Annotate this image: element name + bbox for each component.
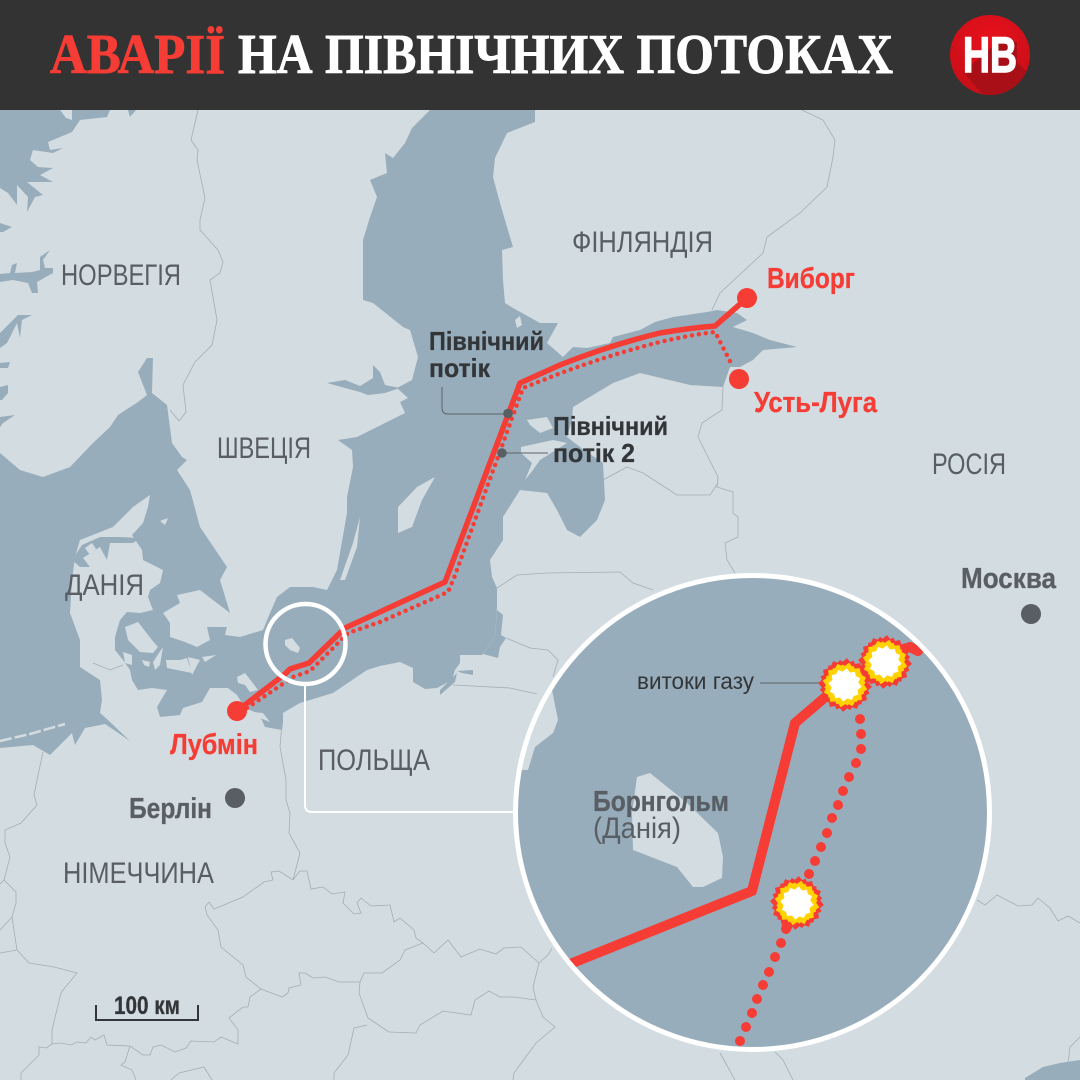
point: Berlin [225, 788, 245, 808]
city labels: Лубмін [170, 729, 258, 761]
title: НА ПІВНІЧНИХ ПОТОКАХ [238, 24, 893, 86]
country labels: ШВЕЦІЯ [217, 432, 311, 465]
city labels: Берлін [129, 793, 212, 825]
sea: north-west Norwegian Sea [0, 110, 110, 212]
inset: Nord Stream 2 dots [735, 714, 866, 1046]
inset: Swedish coast [522, 690, 558, 770]
inset ring [516, 576, 990, 1050]
inset map: Bornholm [500, 576, 990, 1050]
explosion: leak 1 [812, 652, 878, 718]
country labels [61, 226, 1006, 890]
inset: Bornholm island [632, 773, 723, 887]
inset: label Denmark: (Данія) [593, 812, 681, 845]
locator circle around Bornholm [266, 604, 346, 684]
point: Vyborg [737, 288, 757, 308]
callout: Nord Stream 2: Північний [553, 411, 668, 441]
city labels: Москва [961, 563, 1057, 595]
country labels: НІМЕЧЧИНА [63, 857, 214, 890]
connector from locator to inset [305, 686, 515, 812]
inset: label Bornholm: Борнгольм [593, 786, 729, 818]
country labels: ПОЛЬЩА [318, 744, 430, 777]
inset: Nord Stream line [565, 647, 918, 966]
header bar [0, 0, 1080, 110]
callout: Nord Stream 2 [497, 411, 668, 468]
point: Ust-Luga [729, 369, 749, 389]
scale bar: 100 км [114, 992, 180, 1020]
country labels: НОРВЕГІЯ [61, 259, 181, 292]
title: АВАРІЇ [50, 24, 225, 86]
point: Lubmin [227, 701, 247, 721]
inset: label gas leaks: витоки газу [637, 668, 754, 694]
city labels: Усть-Луга [754, 387, 878, 419]
pipeline: Nord Stream 2 dotted route [247, 332, 733, 708]
country labels: ФІНЛЯНДІЯ [572, 226, 713, 259]
Black Sea corner [1025, 1060, 1080, 1080]
callout: Nord Stream 2: потік 2 [553, 438, 635, 468]
sea: North Sea and Baltic Sea [0, 110, 797, 755]
country labels: ДАНІЯ [65, 569, 144, 602]
fjords and inlets [0, 110, 506, 730]
callout: Nord Stream [429, 326, 544, 418]
country labels: РОСІЯ [932, 448, 1006, 481]
explosion: leak 2 [852, 629, 918, 695]
islands [0, 110, 567, 741]
logo: NV: НВ [963, 27, 1017, 83]
explosion: leak 3 [764, 870, 830, 936]
pipeline: Nord Stream solid route [237, 298, 747, 711]
city labels [129, 263, 1057, 825]
callout: Nord Stream: потік [429, 353, 491, 383]
point: Moscow [1021, 604, 1041, 624]
logo: NV [950, 15, 1030, 95]
city labels: Виборг [767, 263, 855, 295]
callout: Nord Stream: Північний [429, 326, 544, 356]
